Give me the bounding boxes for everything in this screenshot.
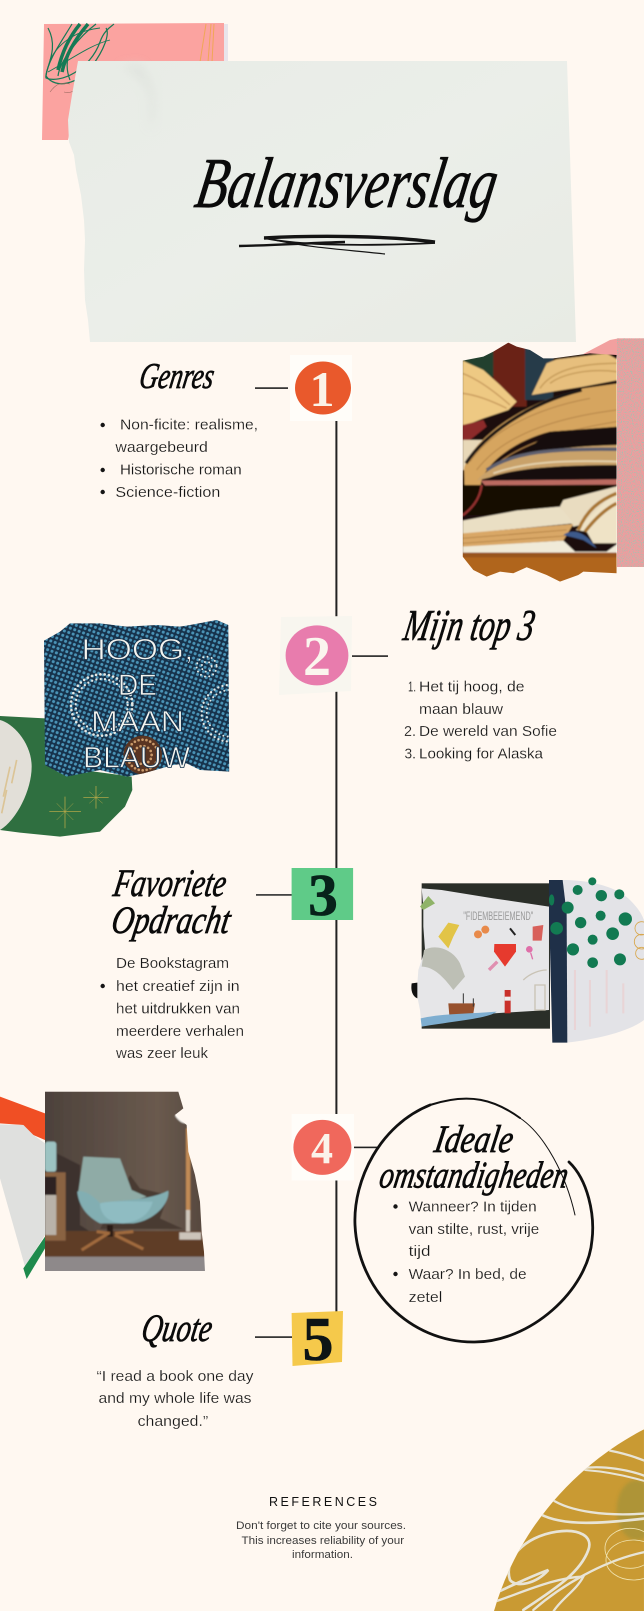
- connector 3: [256, 894, 292, 896]
- section 3 heading: Favoriete: [110, 862, 230, 905]
- section 4 list: Waar? In bed, de: [409, 1267, 527, 1283]
- hand-drawn circle: [355, 1099, 593, 1342]
- section 4 list: Wanneer? In tijden: [409, 1200, 537, 1216]
- section 3 text: meerdere verhalen: [116, 1024, 244, 1040]
- quote text: changed.”: [138, 1414, 208, 1430]
- genres list: Non-ficite: realisme,: [120, 418, 258, 434]
- top 3 list: Het tij hoog, de: [419, 680, 524, 696]
- top 3 list: maan blauw: [419, 702, 504, 718]
- top 3 list: 1.: [408, 680, 416, 696]
- badge 4: [292, 1114, 354, 1180]
- references text: Don't forget to cite your sources.: [236, 1520, 406, 1532]
- top 3 list: [404, 680, 557, 763]
- genres list: waargebeurd: [114, 440, 208, 456]
- section 3 heading: [108, 862, 235, 942]
- badge 1: 1: [310, 361, 334, 417]
- connector 2: [352, 655, 388, 657]
- top 3 list: 3.: [404, 747, 416, 763]
- genres list: Historische roman: [120, 462, 242, 478]
- badge 3: [292, 862, 353, 928]
- section 2 photo: green blob and book cover: [0, 617, 258, 837]
- quote text: “I read a book one day: [96, 1369, 254, 1385]
- references text: information.: [292, 1549, 353, 1561]
- quote text: and my whole life was: [98, 1391, 252, 1407]
- connector 1: [255, 387, 288, 389]
- badge 4: 4: [311, 1124, 333, 1173]
- section 4 photo: chair with torn shapes: [0, 1090, 207, 1279]
- section 4 heading: [376, 1118, 572, 1196]
- poster photo with navy band and dotted shape: "FIDEMBEEIEMEND": [463, 909, 533, 923]
- section 4 list: [393, 1200, 539, 1306]
- references text: This increases reliability of your: [242, 1535, 404, 1547]
- title: Balansverslag: [190, 144, 504, 224]
- section 1 heading: Genres: [136, 357, 217, 397]
- top 3 list: 2.: [404, 724, 416, 740]
- gold scribble circle: [490, 1427, 644, 1611]
- top 3 list: De wereld van Sofie: [419, 724, 557, 740]
- section 3 text: [100, 956, 244, 1062]
- poster photo with navy band and dotted shape: [411, 877, 644, 1043]
- references heading: REFERENCES: [269, 1495, 377, 1509]
- section 3 text: De Bookstagram: [116, 956, 229, 972]
- badge 1: [290, 355, 352, 421]
- section 3 text: was zeer leuk: [115, 1046, 209, 1062]
- cover title text: MAAN: [91, 706, 184, 738]
- pink scribble paper: [42, 23, 228, 140]
- torn shapes: [0, 1097, 45, 1279]
- photo: open books with pink strip: [460, 338, 644, 587]
- cover title text: [82, 634, 194, 774]
- badge 2: [279, 616, 352, 695]
- connector 5: [255, 1336, 292, 1338]
- timeline line: [335, 420, 337, 1312]
- cover title text: DE: [118, 669, 157, 702]
- section 3 text: het uitdrukken van: [116, 1002, 240, 1018]
- badge 2: 2: [303, 626, 331, 688]
- references text: [236, 1520, 406, 1561]
- section 4 heading: omstandigheden: [376, 1155, 572, 1196]
- top 3 list: Looking for Alaska: [419, 747, 544, 763]
- book cover: [44, 620, 230, 776]
- section 2 heading: Mijn top 3: [399, 601, 539, 650]
- genres list: Science-fiction: [115, 485, 220, 501]
- brush underline: [239, 236, 435, 254]
- badge 3: 3: [308, 862, 338, 928]
- section 4 list: van stilte, rust, vrije: [409, 1222, 539, 1238]
- genres list: [100, 418, 258, 501]
- connector 4: [354, 1147, 377, 1148]
- quote text: [96, 1369, 254, 1430]
- section 5 heading: Quote: [138, 1307, 216, 1350]
- section 4 list: zetel: [409, 1290, 442, 1306]
- section 3 heading: Opdracht: [108, 899, 235, 942]
- cover title text: HOOG,: [82, 634, 194, 666]
- badge 5: 5: [302, 1306, 334, 1374]
- title paper: [68, 61, 576, 342]
- cover title text: BLAUW: [83, 742, 191, 774]
- green shape: [0, 716, 132, 837]
- section 3 text: het creatief zijn in: [116, 979, 240, 995]
- section 4 heading: Ideale: [431, 1118, 517, 1161]
- chair photo: [43, 1090, 207, 1273]
- section 4 list: tijd: [409, 1244, 431, 1260]
- badge 5: [292, 1306, 343, 1374]
